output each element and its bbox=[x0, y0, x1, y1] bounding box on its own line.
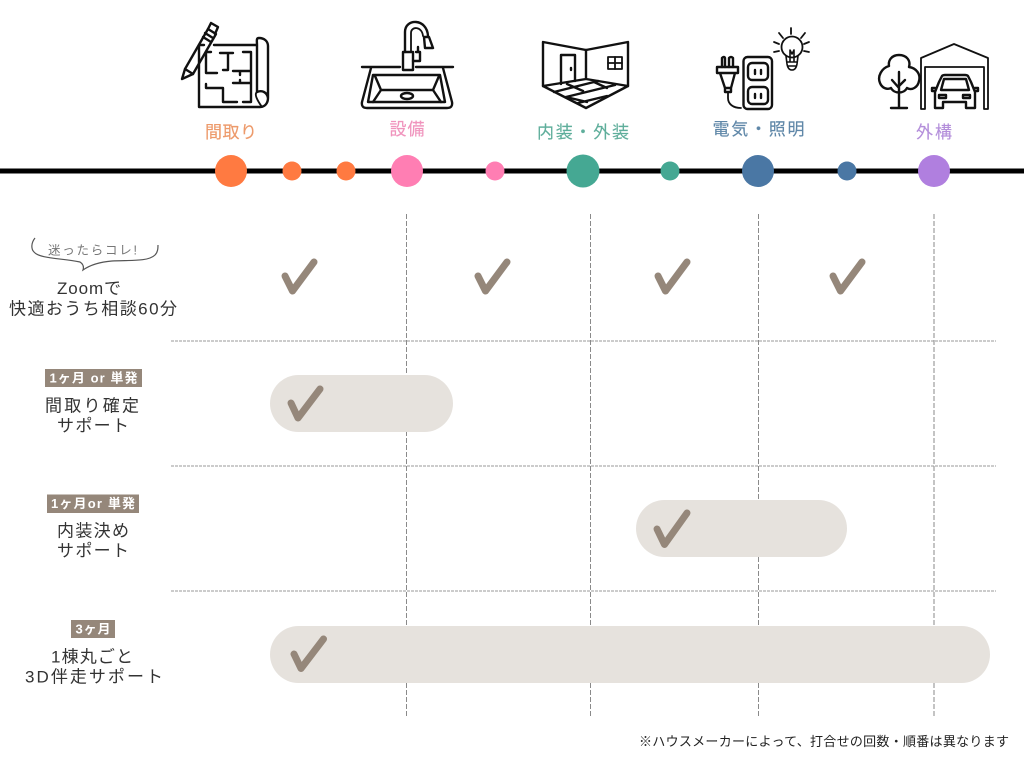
label: 外構: 外構 bbox=[916, 123, 952, 142]
timeline bbox=[0, 154, 1024, 188]
icon: room interior bbox=[543, 42, 628, 108]
row: 間取り確定サポート: 1ヶ月 or 単発 bbox=[50, 370, 138, 386]
row: 内装決めサポート: 1ヶ月or 単発 bbox=[51, 496, 135, 511]
row label: Zoomで快適おうち相談60分 bbox=[9, 279, 177, 318]
icon: plug, outlet and light bulb bbox=[717, 28, 809, 109]
bar: 間取り確定サポート bbox=[270, 375, 453, 432]
row: 1棟丸ごと3D伴走サポート: 3D伴走サポート bbox=[25, 668, 163, 686]
row: 間取り確定サポート bbox=[45, 369, 142, 436]
row: 1棟丸ごと3D伴走サポート: 1棟丸ごと bbox=[51, 648, 133, 666]
bar: 1棟丸ごと3D伴走サポート bbox=[270, 626, 990, 683]
label: 内装・外装: 内装・外装 bbox=[537, 123, 629, 142]
row: 内装決めサポート bbox=[47, 494, 139, 560]
row 1 check marks bbox=[285, 262, 862, 291]
icon: tree and garage with car bbox=[879, 44, 988, 109]
label: 電気・照明: 電気・照明 bbox=[712, 120, 804, 139]
row: 内装決めサポート: サポート bbox=[57, 542, 129, 560]
row: 1棟丸ごと3D伴走サポート: 3ヶ月 bbox=[76, 622, 110, 636]
row: 内装決めサポート: 内装決め bbox=[57, 522, 129, 540]
row: 1棟丸ごと3D伴走サポート bbox=[25, 620, 163, 686]
bar: 内装決めサポート bbox=[636, 500, 847, 557]
row: 間取り確定サポート: サポート bbox=[57, 416, 129, 436]
footnote: ※ハウスメーカーによって、打合せの回数・順番は異なります bbox=[639, 734, 1009, 749]
callout: 迷ったらコレ!: 迷ったらコレ! bbox=[48, 244, 137, 258]
row label: Zoomで快適おうち相談60分: Zoomで bbox=[57, 279, 121, 298]
label: 間取り: 間取り bbox=[205, 123, 257, 142]
label: 設備: 設備 bbox=[390, 120, 424, 139]
row: 間取り確定サポート: 間取り確定 bbox=[45, 396, 139, 416]
icon: kitchen sink with faucet bbox=[362, 22, 453, 108]
icon: floor plan and pencil bbox=[182, 23, 268, 107]
callout: 迷ったらコレ! bbox=[32, 238, 158, 270]
row label: Zoomで快適おうち相談60分: 快適おうち相談60分 bbox=[9, 300, 177, 318]
